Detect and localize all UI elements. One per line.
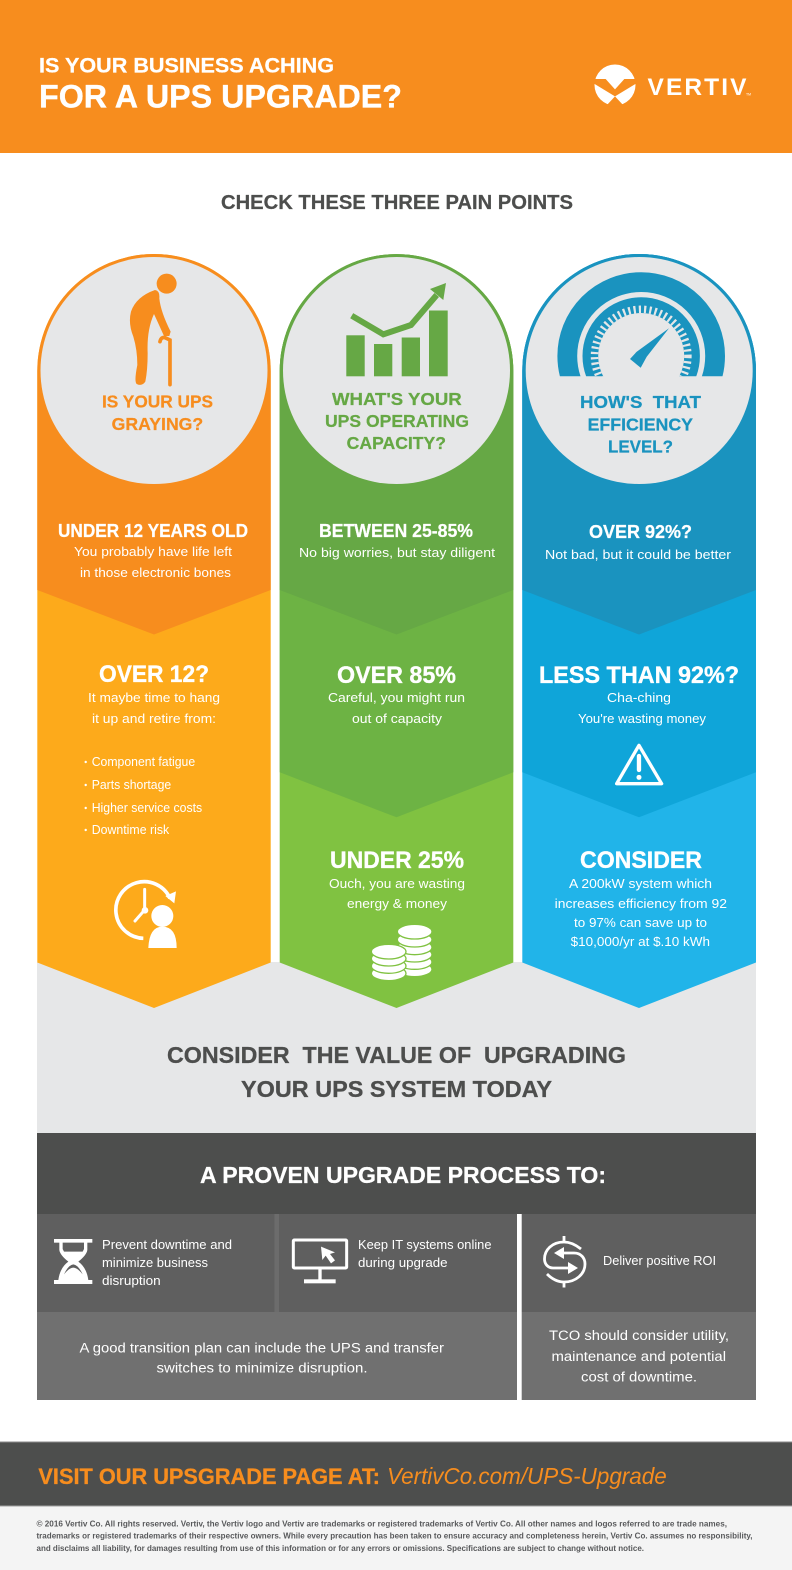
text: keep IT systems online: during upgrade: [358, 1256, 448, 1270]
section heading: CHECK THESE THREE PAIN POINTS: [221, 192, 573, 214]
panel: efficiency column: [522, 254, 756, 1008]
header banner: [0, 0, 792, 153]
text: over 85 percent: OVER 85%: [337, 662, 456, 689]
title: IS YOUR BUSINESS ACHING: [39, 54, 334, 78]
grey conclusion band: [37, 962, 756, 1133]
text: under 25 percent: energy & money: [347, 896, 448, 911]
title: FOR A UPS UPGRADE?: [39, 79, 402, 115]
logo: Vertiv: TM: [746, 92, 751, 96]
icon: dollar exchange arrows: [544, 1236, 585, 1288]
text: over 12: It maybe time to hang: [88, 690, 220, 705]
panel: UPS age column: [37, 254, 271, 1008]
text: prevent downtime: minimize business: [102, 1256, 208, 1270]
footer call to action: VertivCo.com/UPS-Upgrade: [387, 1463, 667, 1489]
text: less than 92 percent: [539, 662, 739, 726]
heading: is your UPS graying: GRAYING?: [112, 414, 203, 434]
heading: efficiency level: HOW'S THAT: [580, 392, 701, 412]
text: under 25 percent: [329, 847, 465, 911]
text: TCO: maintenance and potential: [552, 1349, 726, 1364]
text: consider: CONSIDER: [580, 847, 702, 874]
text: TCO: cost of downtime.: [581, 1370, 697, 1385]
text: keep IT systems online: Keep IT systems online: [358, 1238, 492, 1252]
icon: clock and person: [116, 882, 177, 948]
text: consider: A 200kW system which: [569, 876, 712, 891]
text: consider: increases efficiency from 92: [555, 896, 727, 911]
conclusion text: YOUR UPS SYSTEM TODAY: [241, 1076, 552, 1102]
text: over 92 percent: Not bad, but it could be better: [545, 547, 732, 562]
text: less than 92 percent: Cha-ching: [607, 690, 671, 705]
heading: efficiency level: [580, 392, 701, 457]
icon: warning triangle: [617, 745, 662, 784]
text: over 92 percent: [545, 522, 732, 562]
bullet list: Higher service costs: [92, 801, 202, 815]
heading: operating capacity: UPS OPERATING: [325, 411, 469, 431]
heading: operating capacity: CAPACITY?: [347, 433, 446, 453]
heading: operating capacity: WHAT'S YOUR: [332, 389, 462, 409]
legal text: and disclaims all liability, for damages resulting from use of this information or for any errors or omissions. Specifications are subject to change without notice.: [36, 1543, 644, 1553]
text: deliver positive ROI: Deliver positive ROI: [603, 1254, 716, 1268]
panel: operating capacity column: [280, 254, 513, 1008]
text: under 12 years old: [58, 521, 248, 580]
text: over 92 percent: OVER 92%?: [589, 522, 692, 542]
text: under 12 years old: UNDER 12 YEARS OLD: [58, 521, 248, 541]
icon: coin stacks: [371, 924, 432, 981]
heading: proven upgrade process: A PROVEN UPGRADE PROCESS TO:: [200, 1162, 606, 1188]
text: under 25 percent: UNDER 25%: [330, 847, 464, 874]
bullet list: Parts shortage: [92, 778, 171, 792]
icon: monitor with cursor: [293, 1240, 347, 1283]
text: between 25-85 percent: BETWEEN 25-85%: [319, 521, 473, 541]
title: [39, 54, 402, 115]
heading: is your UPS graying: IS YOUR UPS: [102, 392, 213, 412]
footer call to action: VISIT OUR UPSGRADE PAGE AT:: [38, 1464, 380, 1489]
heading: is your UPS graying: [102, 392, 213, 434]
panel: upgrade process: [37, 1133, 756, 1401]
heading: efficiency level: LEVEL?: [608, 437, 673, 457]
text: TCO: TCO should consider utility,: [549, 1328, 729, 1343]
legal text: trademarks or registered trademarks of their respective owners. While every precaution has been taken to ensure accuracy and completeness herein, Vertiv Co. assumes no responsibility,: [36, 1531, 752, 1541]
icon: stooped elderly person with cane: [130, 274, 177, 385]
text: less than 92 percent: LESS THAN 92%?: [539, 662, 739, 689]
conclusion text: CONSIDER THE VALUE OF UPGRADING: [167, 1042, 626, 1068]
logo: Vertiv: [593, 64, 751, 106]
bullet list: [84, 755, 202, 837]
text: prevent downtime: [102, 1238, 232, 1288]
text: over 85 percent: out of capacity: [352, 711, 443, 726]
logo: Vertiv: VERTIV: [648, 74, 747, 101]
text: under 25 percent: Ouch, you are wasting: [329, 876, 465, 891]
text: transition plan: [80, 1341, 445, 1376]
icon: rising bar chart: [346, 283, 448, 376]
bullet list: Component fatigue: [92, 755, 195, 769]
text: consider: $10,000/yr at $.10 kWh: [571, 934, 710, 949]
icon: speedometer gauge: [557, 272, 725, 376]
text: consider: to 97% can save up to: [574, 915, 707, 930]
text: between 25-85 percent: No big worries, but stay diligent: [299, 545, 495, 560]
text: over 85 percent: Careful, you might run: [328, 690, 465, 705]
heading: operating capacity: [325, 389, 469, 453]
footer call to action: [0, 1442, 792, 1506]
text: over 12: [88, 661, 220, 726]
legal text: © 2016 Vertiv Co. All rights reserved. Vertiv, the Vertiv logo and Vertiv are trademarks or registered trademarks of Vertiv Co. All other names and logos referred to are trade names,: [36, 1519, 727, 1529]
text: transition plan: switches to minimize disruption.: [156, 1361, 368, 1376]
text: over 85 percent: [328, 662, 465, 726]
text: keep IT systems online: [358, 1238, 492, 1270]
text: consider: [555, 847, 727, 949]
legal text: [0, 1506, 792, 1570]
icon: hourglass: [54, 1239, 92, 1284]
heading: efficiency level: EFFICIENCY: [588, 415, 693, 435]
text: TCO: [549, 1328, 729, 1385]
bullet list: Downtime risk: [92, 823, 170, 837]
text: transition plan: A good transition plan can include the UPS and transfer: [80, 1341, 445, 1356]
text: prevent downtime: Prevent downtime and: [102, 1238, 232, 1252]
text: under 12 years old: in those electronic bones: [80, 565, 232, 580]
text: between 25-85 percent: [299, 521, 495, 560]
text: over 12: it up and retire from:: [92, 711, 216, 726]
text: less than 92 percent: You're wasting money: [578, 711, 706, 726]
conclusion text: [167, 1042, 626, 1102]
text: over 12: OVER 12?: [99, 661, 209, 688]
text: under 12 years old: You probably have life left: [74, 544, 232, 559]
text: prevent downtime: disruption: [102, 1274, 161, 1288]
